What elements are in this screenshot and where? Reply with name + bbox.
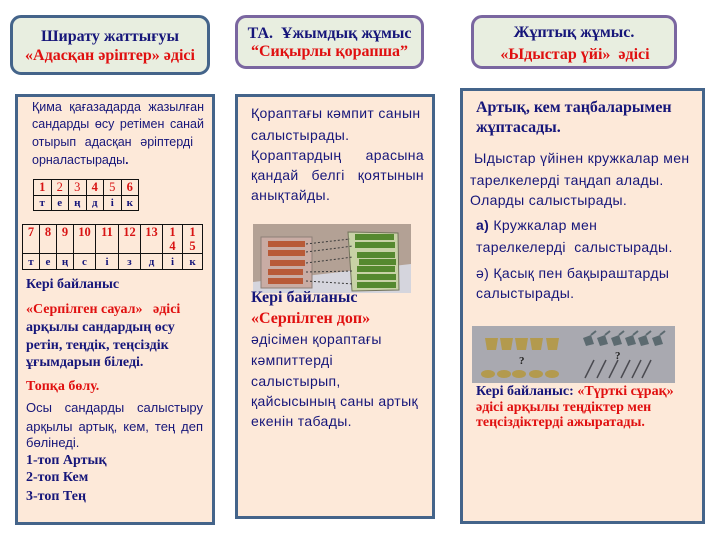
table: numbers 7 to 15: 11 bbox=[101, 225, 113, 239]
table: numbers 7 to 15: 12 bbox=[123, 225, 136, 239]
table: numbers 7 to 15: 9 bbox=[62, 225, 68, 239]
text: compare candies: қандай белгі қоятынын bbox=[251, 167, 424, 183]
text: compare candies: анықтайды. bbox=[251, 187, 330, 203]
table: numbers 7 to 15: 1 bbox=[189, 225, 196, 239]
text: feedback elastic ball: Кері байланыс bbox=[251, 289, 357, 306]
text: elastic question method: ұғымдарын біледі. bbox=[26, 355, 143, 370]
table: numbers 7 to 15: к bbox=[189, 256, 196, 268]
header: warm-up exercise: «Адасқан әріптер» әдісі bbox=[25, 47, 195, 64]
table: numbers 7 to 15: е bbox=[46, 256, 50, 268]
table: numbers 7 to 15: т bbox=[28, 256, 34, 268]
text: feedback nudge question: теңсіздіктерді ажыратады. bbox=[476, 415, 645, 430]
image: cups, plates, pots and spoons: ? bbox=[615, 350, 620, 362]
text: task ae: салыстырады. bbox=[476, 285, 574, 301]
text: elastic question method: ретін, теңдік, теңсіздік bbox=[26, 338, 169, 353]
panel: warm-up instructions bbox=[15, 94, 215, 525]
text: feedback elastic ball: екенін табады. bbox=[251, 413, 352, 429]
text: compare candies: Қораптардың арасына bbox=[251, 147, 424, 163]
text: elastic question method: арқылы сандардың өсу bbox=[26, 320, 175, 335]
table: numbers 7 to 15: 7 bbox=[28, 225, 34, 239]
text: elastic question method: «Серпілген сауал» әдісі bbox=[26, 302, 180, 317]
header: group work: “Сиқырлы қорапша” bbox=[251, 43, 408, 60]
table: numbers 7 to 15: 8 bbox=[45, 225, 51, 239]
text: task ae: ә) Қасық пен бақыраштарды bbox=[476, 265, 669, 281]
text: feedback nudge question: әдісі арқылы теңдіктер мен bbox=[476, 400, 651, 415]
text: pair matching heading bbox=[476, 99, 672, 136]
table: numbers 7 to 15: 13 bbox=[145, 225, 158, 239]
text: group list: 2-топ Кем bbox=[26, 470, 88, 485]
table: numbers 7 to 15: 5 bbox=[189, 239, 196, 253]
text: dishes instruction: Ыдыстар үйінен кружкалар мен bbox=[474, 150, 689, 166]
text: compare candies: салыстырады. bbox=[251, 127, 349, 143]
table: numbers 1 to 6: і bbox=[111, 197, 114, 209]
table: numbers 7 to 15: с bbox=[82, 256, 87, 268]
text: feedback elastic ball: әдісімен қораптағы bbox=[251, 331, 382, 347]
panel: pair work bbox=[460, 88, 705, 524]
image: candy comparison bbox=[253, 224, 411, 293]
panel: group work bbox=[235, 94, 435, 519]
text: feedback elastic ball: қайсысының саны артық bbox=[251, 393, 418, 409]
text: elastic question method bbox=[26, 302, 180, 370]
text: dishes instruction: Оларды салыстырады. bbox=[470, 192, 627, 208]
header: group work bbox=[235, 15, 424, 69]
text: dishes instruction bbox=[470, 150, 689, 208]
text: dishes instruction: тарелкелерді таңдап алады. bbox=[470, 172, 664, 188]
text: group list: 1-топ Артық bbox=[26, 453, 107, 468]
header: pair work: Жұптық жұмыс. bbox=[514, 24, 634, 41]
image: cups, plates, pots and spoons: ? bbox=[519, 355, 524, 367]
header: group work: ТА. Ұжымдық жұмыс bbox=[248, 25, 411, 42]
table: numbers 1 to 6: к bbox=[127, 197, 133, 209]
text: pair matching heading: Артық, кем таңбаларымен bbox=[476, 99, 672, 116]
table: numbers 1 to 6: 1 bbox=[39, 180, 45, 194]
table: numbers 7 to 15: д bbox=[149, 256, 154, 268]
text: group list: 3-топ Тең bbox=[26, 489, 86, 504]
header: pair work: «Ыдыстар үйі» әдісі bbox=[500, 46, 650, 63]
text: cut-paper instruction: сандарды өсу ретімен санай bbox=[32, 117, 204, 131]
table: numbers 1 to 6: 3 bbox=[74, 180, 80, 194]
table: numbers 7 to 15: з bbox=[127, 256, 132, 268]
text: feedback heading: Кері байланыс bbox=[26, 277, 119, 292]
text: feedback elastic ball: «Серпілген доп» bbox=[251, 310, 370, 327]
table: numbers 7 to 15 bbox=[22, 224, 203, 270]
table: numbers 7 to 15: 1 bbox=[169, 225, 176, 239]
header: pair work bbox=[471, 15, 677, 69]
text: grouping description: бөлінеді. bbox=[26, 435, 79, 450]
header: warm-up exercise bbox=[10, 15, 210, 75]
table: numbers 1 to 6: т bbox=[40, 197, 45, 209]
text: compare candies bbox=[251, 105, 424, 203]
text: compare candies: Қораптағы кәмпит санын bbox=[251, 105, 420, 121]
table: numbers 1 to 6: 2 bbox=[57, 180, 63, 194]
table: numbers 1 to 6: 6 bbox=[127, 180, 133, 194]
text: task a: тарелкелерді салыстырады. bbox=[476, 239, 673, 255]
text: task a bbox=[476, 217, 673, 255]
text: feedback nudge question bbox=[476, 384, 674, 430]
text: feedback elastic ball: кәмпиттерді bbox=[251, 352, 333, 368]
text: cut-paper instruction bbox=[32, 100, 204, 167]
table: numbers 1 to 6: 5 bbox=[109, 180, 115, 194]
table: numbers 1 to 6: е bbox=[57, 197, 62, 209]
text: grouping description: арқылы артық, кем, тең деп bbox=[26, 419, 203, 434]
text: grouping description: Осы сандарды салыстыру bbox=[26, 400, 203, 415]
table: numbers 7 to 15: і bbox=[105, 256, 109, 268]
table: numbers 7 to 15: і bbox=[171, 256, 174, 268]
text: task ae bbox=[476, 265, 669, 301]
text: grouping description bbox=[26, 400, 203, 450]
text: grouping heading: Топқа бөлу. bbox=[26, 379, 99, 394]
table: numbers 7 to 15: 10 bbox=[78, 225, 91, 239]
table: numbers 1 to 6 bbox=[33, 179, 139, 211]
text: cut-paper instruction: орналастырады. bbox=[32, 153, 129, 167]
text: pair matching heading: жұптасады. bbox=[476, 119, 561, 136]
text: cut-paper instruction: Қима қағазадарда жазылған bbox=[32, 100, 204, 114]
image: cups, plates, pots and spoons bbox=[472, 326, 675, 383]
text: feedback nudge question: Кері байланыс: «Түрткі сұрақ» bbox=[476, 384, 674, 399]
text: cut-paper instruction: отырып адасқан әріптерді bbox=[32, 135, 193, 149]
header: warm-up exercise: Ширату жаттығуы bbox=[41, 28, 179, 45]
table: numbers 7 to 15: ң bbox=[62, 256, 68, 268]
text: task a: а) Кружкалар мен bbox=[476, 217, 597, 233]
text: feedback elastic ball bbox=[251, 289, 418, 429]
table: numbers 1 to 6: 4 bbox=[92, 180, 98, 194]
text: group list bbox=[26, 453, 107, 504]
text: feedback elastic ball: салыстырып, bbox=[251, 373, 341, 389]
table: numbers 1 to 6: д bbox=[92, 197, 98, 209]
table: numbers 1 to 6: ң bbox=[74, 197, 80, 209]
table: numbers 7 to 15: 4 bbox=[169, 239, 176, 253]
